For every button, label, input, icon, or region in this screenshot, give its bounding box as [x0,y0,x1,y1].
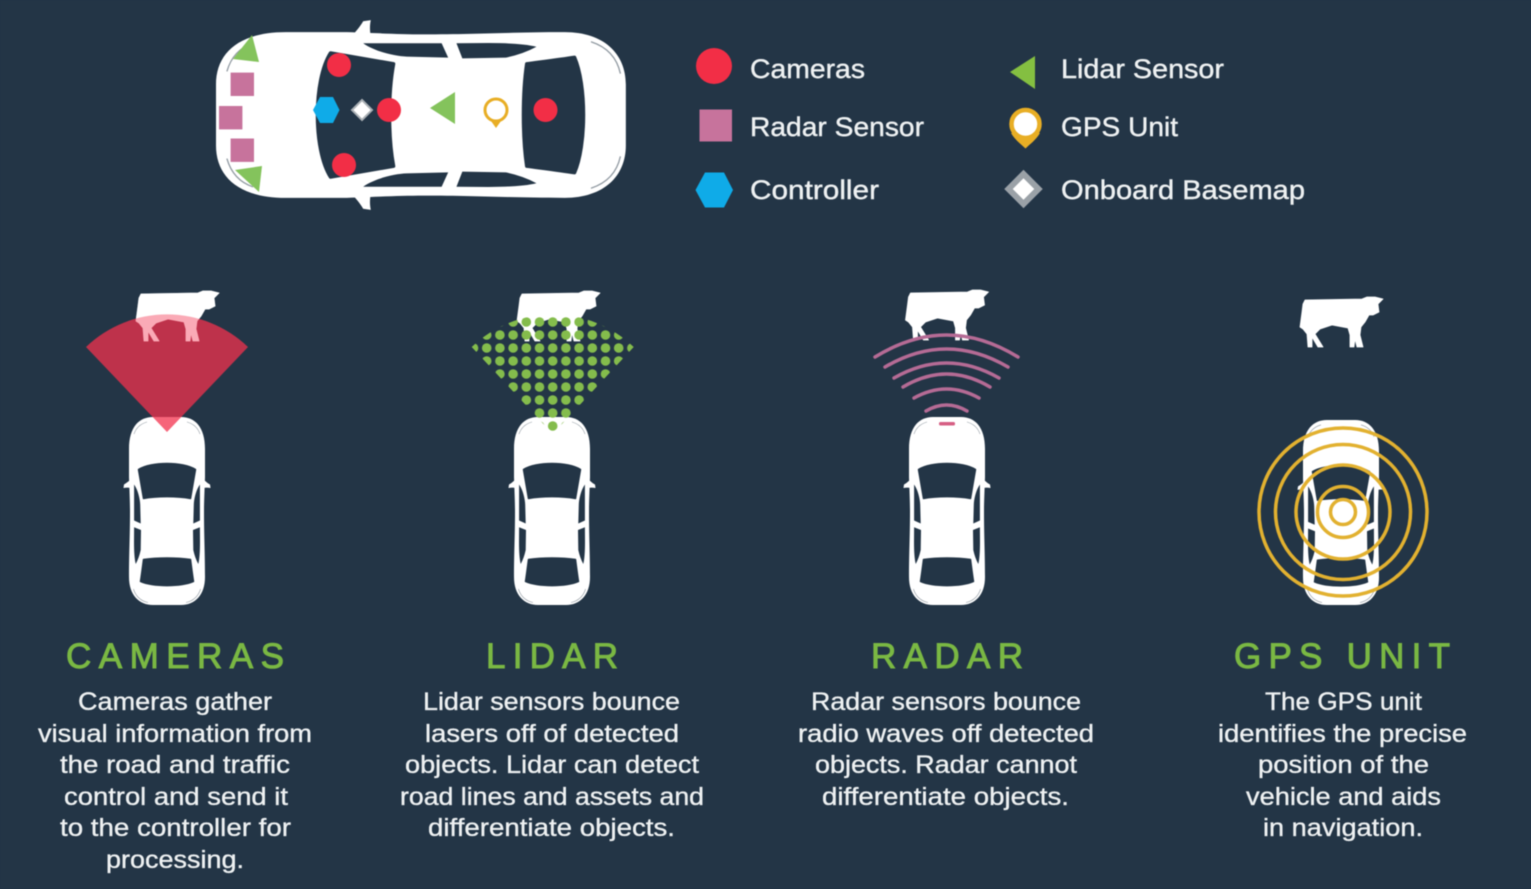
text: cameras description: Cameras gather [78,688,272,716]
text: lidar description [400,688,704,842]
radar emitter [939,422,955,426]
text: radar description: Radar sensors bounce [811,688,1081,716]
legend: onboard basemap: Onboard Basemap [1061,175,1305,205]
text: lidar description: objects. Lidar can detect [405,751,699,779]
icon: cow [1300,297,1383,347]
text: lidar description: Lidar sensors bounce [423,688,680,716]
text: radar description: differentiate objects. [822,783,1069,811]
icon: cow [136,291,219,341]
text: cameras description: the road and traffic [60,751,290,779]
text: GPS description: vehicle and aids [1246,783,1441,811]
text: cameras description: to the controller for [60,814,291,842]
GPS signal rings [1259,428,1427,596]
heading: radar: RADAR [871,637,1023,676]
text: cameras description: processing. [106,846,244,874]
legend: GPS unit [1011,110,1179,148]
icon: roof lidar sensor on car [430,92,455,124]
icon: cow seen through field of view [136,291,219,341]
legend: cameras [696,48,865,84]
legend: controller [696,172,879,208]
panel: GPS unit [1218,297,1467,842]
icon: GPS unit on car [485,99,507,128]
icon: cameras on car [327,53,558,177]
icon: onboard basemap on car [352,100,372,120]
text: GPS description: The GPS unit [1265,688,1422,716]
heading: cameras: CAMERAS [66,637,284,676]
icon: large car [216,20,626,210]
text: lidar description: road lines and assets and [400,783,704,811]
heading: lidar: LIDAR [486,637,618,676]
legend: radar sensor [700,110,924,142]
legend: GPS unit: GPS Unit [1061,112,1179,142]
top-view car with sensor locations [216,20,626,210]
text: cameras description: visual information from [38,720,312,748]
icon: car [124,417,210,605]
text: GPS description [1218,688,1467,842]
text: GPS description: in navigation. [1263,814,1423,842]
radar waves [875,335,1018,411]
legend: lidar sensor [1010,54,1224,89]
legend: radar sensor: Radar Sensor [750,112,924,142]
text: lidar description: differentiate objects. [428,814,675,842]
legend: lidar sensor: Lidar Sensor [1061,54,1224,84]
icon: cow [517,291,600,341]
legend: cameras: Cameras [750,54,865,84]
text: radar description [798,688,1094,811]
icon: car [508,417,596,605]
text: radar description: radio waves off detected [798,720,1094,748]
icon: car [1298,420,1384,605]
icon: radar sensors on car [219,73,254,162]
icon: car [904,417,990,605]
heading: GPS unit: GPS UNIT [1234,637,1450,676]
icon: controller on car [313,97,340,123]
lidar dot field [472,314,634,434]
text: radar description: objects. Radar cannot [815,751,1077,779]
camera field of view [86,314,248,432]
panel: lidar [400,291,704,842]
icon: cow [906,290,988,340]
text: lidar description: lasers off of detected [425,720,679,748]
panel: cameras [38,291,312,874]
panel: radar [798,290,1094,811]
text: GPS description: position of the [1258,751,1429,779]
text: cameras description [38,688,312,874]
text: cameras description: control and send it [64,783,288,811]
icon: front lidar sensors on car [233,35,262,192]
text: GPS description: identifies the precise [1218,720,1467,748]
legend: controller: Controller [750,175,879,205]
legend [696,48,1305,208]
